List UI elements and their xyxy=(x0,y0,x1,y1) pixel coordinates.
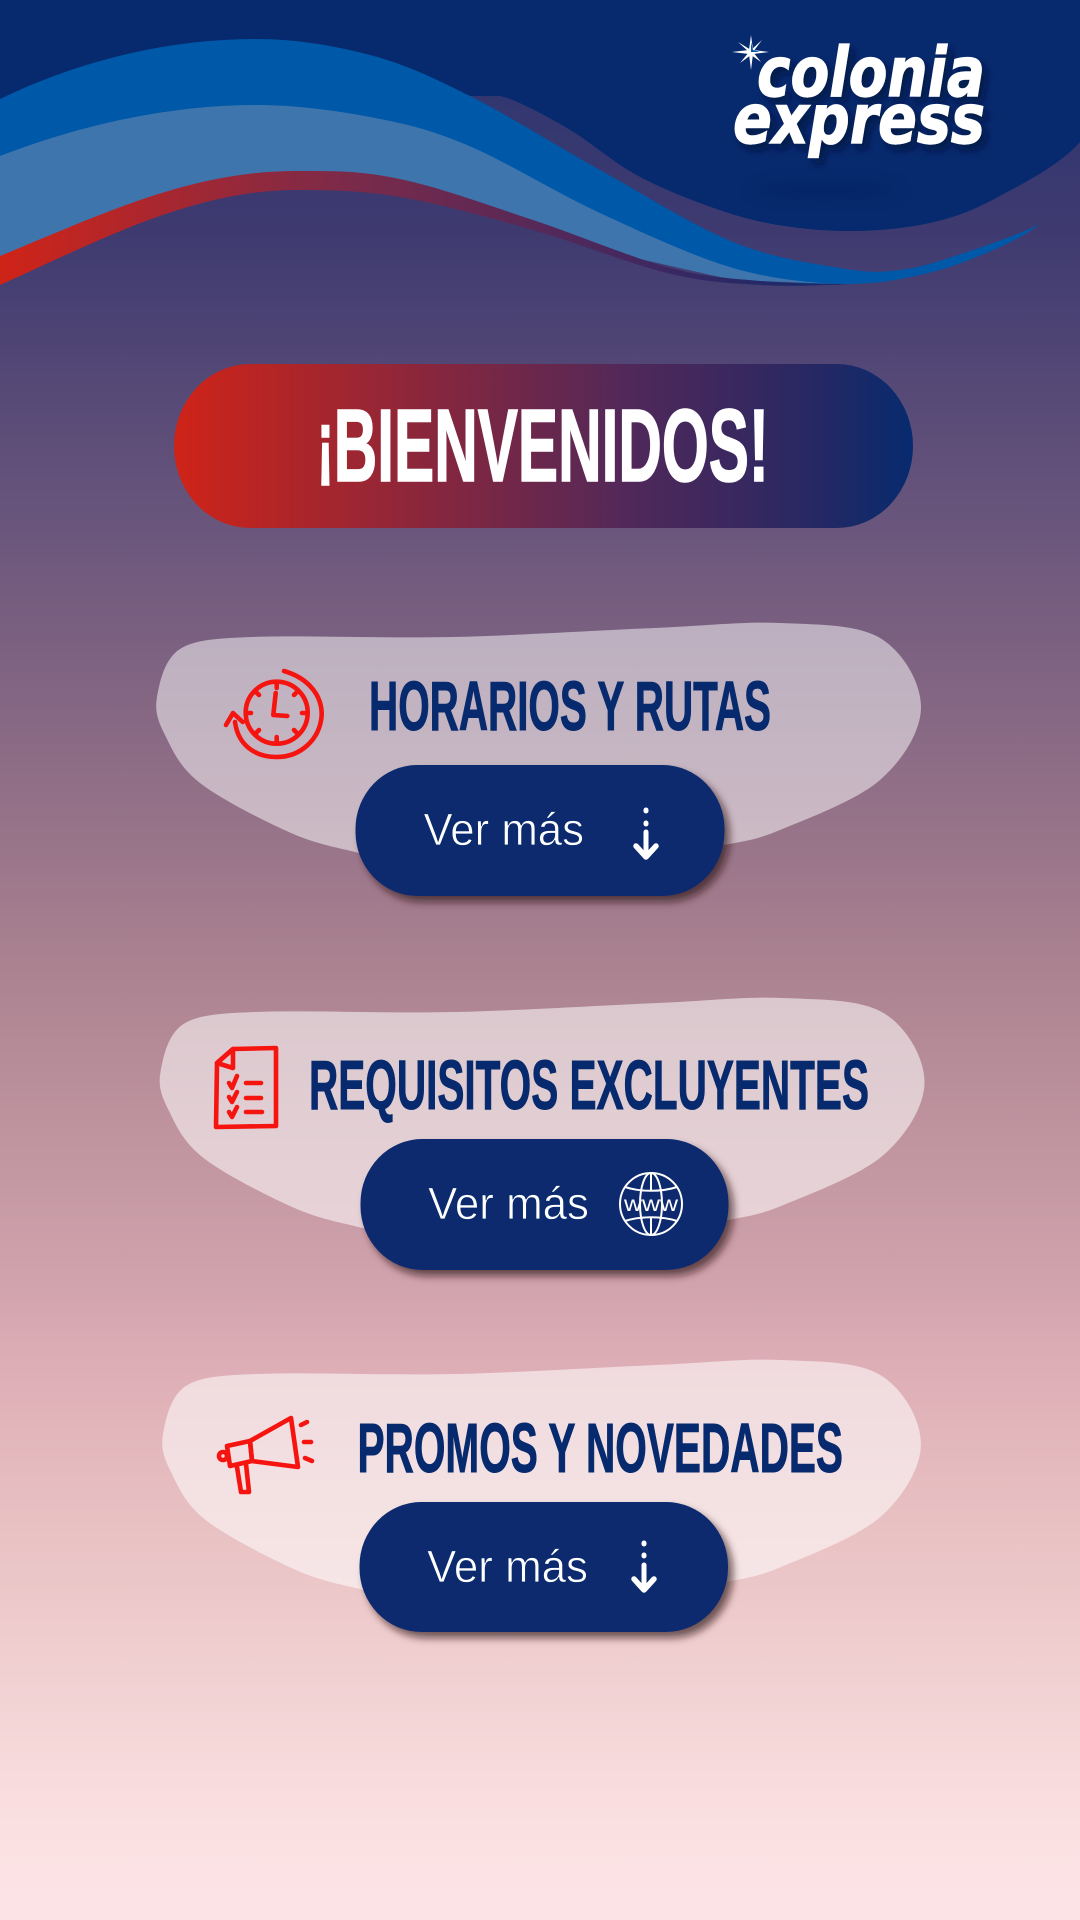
panel: promos y novedades xyxy=(162,1360,921,1632)
icon: www globe xyxy=(620,1173,682,1235)
welcome banner xyxy=(174,364,913,528)
icon: compass star xyxy=(732,35,769,70)
header waves xyxy=(0,0,1080,286)
blob background xyxy=(156,623,921,853)
button: ver mas xyxy=(360,1502,728,1632)
icon: www globe: www xyxy=(623,1193,679,1216)
blob background xyxy=(162,1360,921,1590)
blob background xyxy=(160,998,925,1228)
icon: checklist document xyxy=(216,1048,276,1127)
icon: down arrow xyxy=(634,1543,654,1590)
heading: HORARIOS Y RUTAS xyxy=(369,667,771,745)
button: ver mas: Ver más xyxy=(428,1178,589,1229)
icon: clock xyxy=(226,671,322,757)
button: ver mas xyxy=(356,765,724,896)
icon: megaphone xyxy=(219,1418,312,1492)
panel: horarios y rutas xyxy=(156,623,921,896)
button: ver mas: Ver más xyxy=(427,1541,588,1592)
logo: colonia express: colonia xyxy=(757,33,985,113)
logo: colonia express xyxy=(732,33,985,160)
welcome banner: ¡ xyxy=(317,394,334,490)
welcome banner: BIENVENIDOS! xyxy=(334,388,769,503)
panel: requisitos excluyentes xyxy=(160,998,925,1270)
icon: down arrow xyxy=(636,810,656,857)
logo: colonia express: express xyxy=(733,80,985,160)
button: ver mas xyxy=(360,1139,728,1270)
button: ver mas: Ver más xyxy=(424,804,584,855)
